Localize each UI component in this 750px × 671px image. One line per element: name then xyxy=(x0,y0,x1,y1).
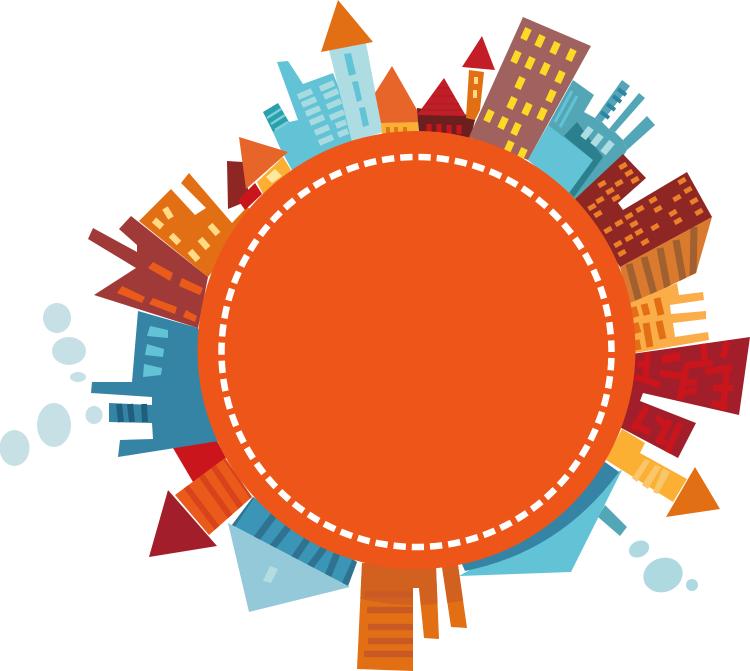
building: top tower with teal block xyxy=(263,0,383,170)
building: teal factory with chimneys xyxy=(528,80,655,199)
building: big red block xyxy=(610,337,750,458)
planet disc xyxy=(198,131,636,569)
building: lower left blue striped block xyxy=(228,493,357,612)
dashed white road ring xyxy=(222,157,612,547)
blobs: left cloud xyxy=(0,303,102,466)
building: left maroon block xyxy=(88,216,208,328)
building: orange roof house xyxy=(375,66,424,135)
building: upper left small house xyxy=(227,137,291,210)
building: red roof house xyxy=(417,78,475,140)
building: lower left orange block with red triangle xyxy=(149,441,254,557)
building: light orange block xyxy=(630,283,709,353)
building: dark red block with orange windows xyxy=(575,154,712,305)
building: left blue block xyxy=(91,311,225,457)
building: lower right teal block xyxy=(458,462,627,576)
building: yellow block with orange triangle roof xyxy=(606,429,720,517)
building: brown tower with yellow windows xyxy=(469,17,591,160)
blobs: right cloud xyxy=(626,537,698,598)
building: bottom orange tower xyxy=(357,563,467,671)
building: left orange block xyxy=(139,173,260,277)
building: red spire tower xyxy=(462,36,495,120)
